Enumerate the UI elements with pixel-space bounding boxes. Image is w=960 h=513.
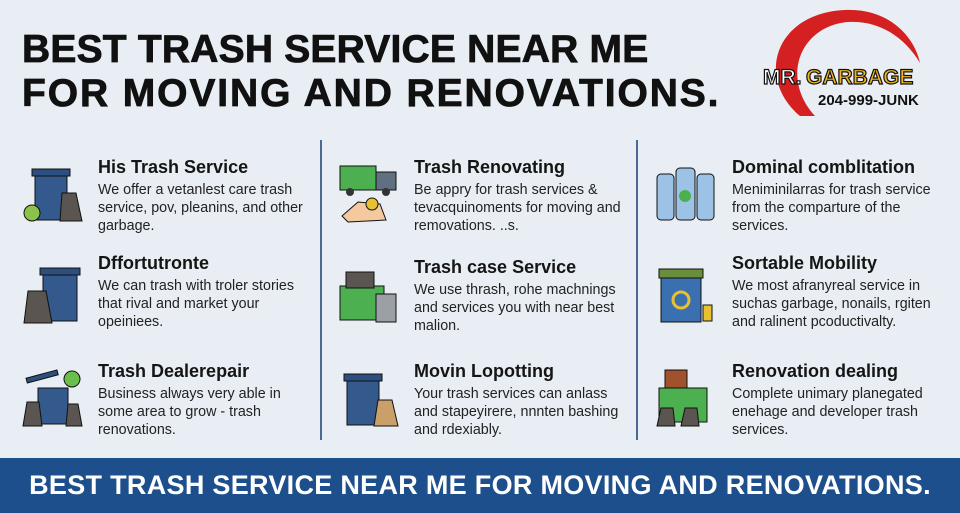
title <box>22 28 720 115</box>
icon: trash bin 1 <box>24 168 83 222</box>
logo: GARBAGE <box>806 66 913 89</box>
icon: recycling bin <box>658 268 712 322</box>
icon: trash bin 2 <box>23 268 80 324</box>
title: BEST TRASH SERVICE NEAR ME <box>22 28 648 71</box>
footer banner: BEST TRASH SERVICE NEAR ME FOR MOVING AND RENOVATIONS. <box>29 470 931 500</box>
item 9 <box>732 361 923 438</box>
icon: trash bin 3 <box>22 369 83 426</box>
icon: truck <box>340 166 396 222</box>
item 1 <box>98 157 303 234</box>
item 2 <box>98 253 294 330</box>
item 2: We can trash with troler stories that rival and market your opeiniees. <box>98 278 294 330</box>
item 3: Trash Dealerepair <box>98 361 249 381</box>
item 5 <box>414 257 616 334</box>
item 2: Dffortutronte <box>98 253 209 273</box>
item 6 <box>414 361 618 438</box>
item 4: Be appry for trash services & tevacquinoments for moving and removations. ..s. <box>414 182 621 234</box>
item 8: We most afranyreal service in suchas garbage, nonails, rgiten and ralinent pcoductivalty. <box>732 278 931 330</box>
logo <box>763 10 920 116</box>
item 8: Sortable Mobility <box>732 253 877 273</box>
icon: green bin <box>656 370 708 426</box>
item 9: Renovation dealing <box>732 361 898 381</box>
item 8 <box>732 253 931 330</box>
item 3 <box>98 361 281 438</box>
logo: 204-999-JUNK <box>818 92 919 109</box>
item 6: Movin Lopotting <box>414 361 554 381</box>
item 4: Trash Renovating <box>414 157 565 177</box>
icon: bottles <box>656 168 714 220</box>
item 5: We use thrash, rohe machnings and services you with near best malion. <box>414 282 616 334</box>
title: FOR MOVING AND RENOVATIONS. <box>22 72 720 115</box>
item 5: Trash case Service <box>414 257 576 277</box>
item 1: We offer a vetanlest care trash service, pov, pleanins, and other garbage. <box>98 182 303 234</box>
item 1: His Trash Service <box>98 157 248 177</box>
item 6: Your trash services can anlass and stapeyirere, nnnten bashing and rdexiably. <box>414 386 618 438</box>
item 7: Dominal comblitation <box>732 157 915 177</box>
item 7: Meniminilarras for trash service from the comparture of the services. <box>732 182 931 234</box>
item 3: Business always very able in some area to grow - trash renovations. <box>98 386 281 438</box>
icon: bin with bag <box>344 374 399 426</box>
item 7 <box>732 157 931 234</box>
item 4 <box>414 157 621 234</box>
icon: dumpster <box>340 272 396 322</box>
footer banner <box>0 458 960 513</box>
item 9: Complete unimary planegated enehage and developer trash services. <box>732 386 923 438</box>
logo: MR. <box>763 66 802 89</box>
